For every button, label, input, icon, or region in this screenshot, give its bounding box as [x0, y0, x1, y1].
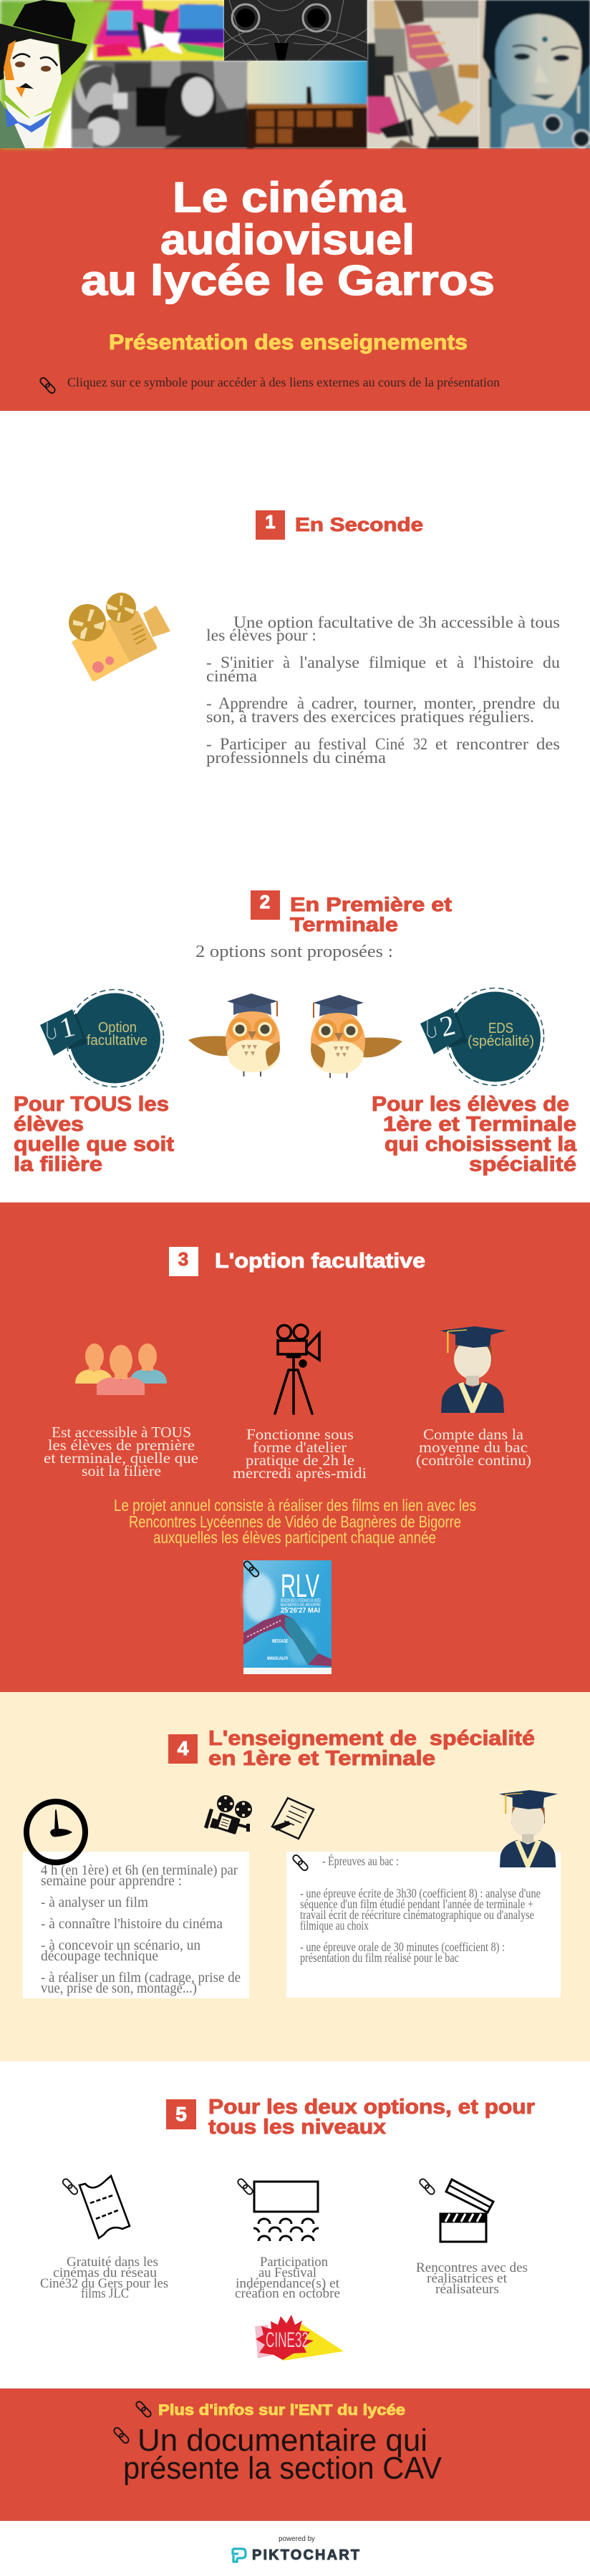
badge 1: 1: [265, 511, 276, 533]
collage: students with camera photo: [367, 0, 479, 148]
text: pour tous: élèves: [14, 1113, 84, 1136]
panel: bac box: séquence d'un film étudié pendant l'année de terminale +: [300, 1897, 533, 1911]
icon: black film projector: [204, 1795, 252, 1834]
logo: Ciné 32: [255, 2315, 344, 2361]
poster: RLV: BAGNÈRES-DE-BIGORRE: [281, 1603, 321, 1608]
panel: hours box: - à analyser un film: [41, 1895, 148, 1910]
collage: black web with eyes: [224, 0, 367, 61]
icon: graduate small: [499, 1790, 558, 1867]
title: Le cinéma: [173, 174, 406, 221]
panel: bac box: [286, 1852, 561, 1998]
text block: section 1 description: et: [435, 653, 448, 671]
text: pour les élèves: [372, 1093, 577, 1176]
text: atelier: forme d'atelier: [253, 1439, 347, 1456]
heading: enseignement de spécialité: L'enseignement de spécialité: [208, 1727, 535, 1750]
panel: section 3: [44, 1247, 531, 1674]
text: pour les élèves: Pour les élèves de: [372, 1093, 569, 1116]
panel: bac box: présentation du film réalisé pour le bac: [300, 1950, 459, 1965]
poster: RLV: [243, 1560, 332, 1674]
panel: hours box: - à connaître l'histoire du cinéma: [41, 1916, 223, 1932]
icon: cinema screen: [237, 2178, 319, 2241]
badge 4: 4: [178, 1737, 189, 1759]
heading: En Première et Terminale: En Première et: [290, 893, 452, 915]
circle: EDS: (spécialité): [468, 1034, 534, 1049]
panel: hours box: vue, prise de son, montage...): [41, 1980, 197, 1996]
title: [81, 174, 495, 304]
badge 3: 3: [178, 1248, 188, 1270]
panel: bac box: - une épreuve orale de 30 minutes (coefficient 8) :: [300, 1940, 505, 1954]
text: festival: création en octobre: [235, 2287, 340, 2301]
text: documentaire: Un documentaire qui: [137, 2423, 427, 2458]
badge 2: 2: [260, 891, 270, 913]
panel: section 4: [23, 1727, 561, 1998]
text block: section 1 description: festival: [318, 735, 367, 753]
text: projet annuel: [114, 1496, 476, 1547]
link legend text: Cliquez sur ce symbole pour accéder à des liens externes au cours de la présentation: [67, 375, 500, 389]
icon: link documentaire: [113, 2426, 130, 2444]
text block: section 1 description: Apprendre: [218, 694, 288, 712]
panel: footer: [113, 2401, 442, 2563]
text: projet annuel: Rencontres Lycéennes de Vidéo de Bagnères de Bigorre: [129, 1512, 461, 1531]
text block: section 1 description: au: [294, 735, 311, 753]
text: projet annuel: Le projet annuel consiste à réaliser des films en lien avec les: [114, 1496, 476, 1515]
text: gratuité: Gratuité dans les: [67, 2255, 158, 2270]
text: gratuité: [40, 2255, 168, 2301]
circle: option facultative: 1: [57, 1010, 78, 1044]
panel: bac box: filmique au choix: [300, 1918, 369, 1933]
text: pour tous: [14, 1093, 174, 1176]
text block: section 1 description: -: [206, 735, 212, 753]
text: atelier: pratique de 2h le: [246, 1452, 354, 1469]
logo: Ciné 32: CINE32: [266, 2328, 309, 2352]
heading: pour les deux options: Pour les deux options, et pour: [208, 2096, 535, 2119]
badge 5: [166, 2099, 196, 2129]
text: pour les élèves: spécialité: [469, 1153, 576, 1176]
icon: link ENT: [135, 2401, 152, 2418]
photo collage banner: [0, 0, 590, 148]
text: powered by: powered by: [279, 2534, 316, 2543]
panel: bac box: travail écrit de réécriture cinématographique ou d'analyse: [300, 1907, 534, 1922]
collage: woman portrait: [479, 0, 590, 148]
panel: hours box: - à concevoir un scénario, un: [41, 1938, 200, 1953]
circle: EDS: EDS: [488, 1021, 513, 1036]
text block: section 1 description: tourner,: [364, 694, 417, 712]
text: accessible: [44, 1424, 198, 1479]
text: pour tous: quelle que soit: [14, 1133, 174, 1156]
icon: camera on tripod: [275, 1325, 319, 1414]
panel: section 1: [69, 510, 561, 767]
icon: clapperboard: [419, 2178, 493, 2242]
text: pour tous: la filière: [14, 1153, 102, 1176]
badge 2: [251, 890, 280, 920]
badge 4: [168, 1734, 198, 1764]
heading: pour les deux options: tous les niveaux: [208, 2116, 386, 2139]
text block: section 1 description: Une option facultative de 3h accessible à tous: [233, 613, 560, 631]
icon: link legend: [39, 376, 56, 394]
text: rencontres: réalisateurs: [435, 2283, 499, 2297]
text: festival: indépendance(s) et: [236, 2277, 340, 2291]
text: atelier: [233, 1426, 367, 1482]
text: documentaire: [123, 2423, 442, 2486]
panel: hours box: - à réaliser un film (cadrage, prise de: [41, 1970, 241, 1986]
text block: section 1 description: rencontrer: [456, 735, 528, 753]
text block: section 1 description: des: [536, 735, 560, 753]
poster: RLV: MESSAGE: [272, 1639, 288, 1644]
text block: section 1 description: à: [283, 653, 290, 671]
text: plus d'infos: Plus d'infos sur l'ENT du lycée: [158, 2402, 405, 2419]
icon: clock: [26, 1802, 85, 1862]
text: moyenne du bac: moyenne du bac: [419, 1439, 528, 1456]
text: gratuité: cinémas du réseau: [53, 2266, 157, 2280]
text block: section 1 description: -: [206, 694, 212, 712]
heading: pour les deux options: [208, 2096, 535, 2139]
badge 3: [169, 1247, 198, 1276]
text: moyenne du bac: Compte dans la: [423, 1426, 524, 1443]
panel: bac box: - une épreuve écrite de 3h30 (coefficient 8) : analyse d'une: [300, 1886, 541, 1900]
text: pour les élèves: qui choisissent la: [385, 1133, 577, 1156]
heading: L'option facultative: L'option facultative: [215, 1250, 425, 1273]
text: gratuité: films JLC: [81, 2287, 129, 2301]
panel: hours box: découpage technique: [41, 1948, 158, 1964]
text block: section 1 description: à: [297, 694, 304, 712]
collage: colourful painting: [93, 0, 224, 61]
text block: section 1 description: du: [543, 653, 561, 671]
text block: section 1 description: et: [435, 735, 448, 753]
icon: people: [75, 1343, 167, 1395]
poster: RLV: RENCONTRES LYCÉENNES DE VIDÉO: [281, 1598, 321, 1603]
text block: section 1 description: l'histoire: [473, 653, 533, 671]
text: accessible: les élèves de première: [48, 1437, 195, 1454]
heading: enseignement de spécialité: en 1ère et Terminale: [208, 1747, 435, 1770]
heading: enseignement de spécialité: [208, 1727, 535, 1770]
text block: section 1 description: filmique: [369, 653, 426, 671]
heading: En Première et Terminale: [290, 893, 452, 935]
text: documentaire: présente la section CAV: [123, 2451, 442, 2486]
panel: section 2: [14, 890, 577, 1176]
text: accessible: soit la filière: [82, 1462, 161, 1479]
circle: option facultative: Option: [98, 1020, 137, 1036]
badge 1: [256, 510, 285, 540]
text block: section 1 description: [206, 613, 561, 767]
text: moyenne du bac: [416, 1426, 531, 1469]
text block: section 1 description: cinéma: [206, 667, 257, 685]
text: festival: [235, 2255, 340, 2301]
text block: section 1 description: les élèves pour :: [206, 626, 316, 644]
text block: section 1 description: professionnels du cinéma: [206, 749, 386, 767]
icon: ticket: [62, 2176, 130, 2238]
collage: black and white classroom: [72, 61, 254, 148]
collage: wall with silhouette: [247, 61, 367, 148]
subtitle: Présentation des enseignements: [109, 331, 468, 354]
text: atelier: Fonctionne sous: [246, 1426, 354, 1443]
text block: section 1 description: S'initier: [221, 653, 274, 671]
collage: Chaplin portrait: [0, 0, 113, 148]
icon: paper and pencil: [272, 1798, 314, 1839]
text: rencontres: [416, 2261, 528, 2297]
circle: option facultative: [40, 989, 163, 1087]
text: moyenne du bac: (contrôle continu): [416, 1452, 531, 1469]
panel: hours box: [23, 1852, 249, 1998]
text: rencontres: Rencontres avec des: [416, 2261, 528, 2275]
text: accessible: et terminale, quelle que: [44, 1449, 198, 1467]
text: 2 options: 2 options sont proposées :: [195, 943, 393, 961]
icon: graduate: [440, 1326, 506, 1413]
text: festival: au Festival: [258, 2266, 316, 2280]
text block: section 1 description: cadrer,: [311, 694, 357, 712]
heading: En Première et Terminale: Terminale: [290, 913, 398, 935]
title: audiovisuel: [160, 216, 415, 263]
icon: owl left: [188, 993, 280, 1076]
circle: option facultative: facultative: [87, 1033, 148, 1049]
text block: section 1 description: monter,: [424, 694, 476, 712]
text: accessible: Est accessible à TOUS: [52, 1424, 191, 1441]
text block: section 1 description: Participer: [220, 735, 286, 753]
text block: section 1 description: son, à travers des exercices pratiques réguliers.: [206, 708, 534, 726]
text block: section 1 description: -: [206, 653, 212, 671]
poster: RLV: RLV: [281, 1568, 319, 1604]
circle: EDS: 2: [437, 1008, 458, 1043]
icon: owl right: [311, 995, 402, 1078]
circle: EDS: [420, 988, 544, 1085]
panel: bac box: - Épreuves au bac :: [322, 1853, 399, 1868]
text block: section 1 description: prendre: [483, 694, 536, 712]
text block: section 1 description: l'analyse: [299, 653, 359, 671]
text: atelier: mercredi après-midi: [233, 1464, 367, 1482]
text: projet annuel: auxquelles les élèves participent chaque année: [153, 1528, 436, 1547]
text: pour les élèves: 1ère et Terminale: [383, 1113, 576, 1136]
panel: hours box: 4 h (en 1ère) et 6h (en terminale) par: [41, 1862, 238, 1878]
text block: section 1 description: Ciné: [375, 735, 405, 753]
badge 5: 5: [175, 2103, 187, 2125]
panel: section 5: [40, 2096, 535, 2361]
title: au lycée le Garros: [81, 257, 495, 304]
text block: section 1 description: du: [543, 694, 561, 712]
text: festival: Participation: [260, 2255, 328, 2270]
logo: Piktochart: PIKTOCHART: [252, 2547, 359, 2563]
text: pour tous: Pour TOUS les: [14, 1093, 169, 1116]
text block: section 1 description: à: [457, 653, 464, 671]
poster: RLV: 25'26'27 MAI: [281, 1607, 320, 1615]
text: gratuité: Ciné32 du Gers pour les: [40, 2277, 168, 2291]
poster: RLV: WWW.RLV65.FR: [267, 1657, 288, 1661]
panel: hours box: semaine pour apprendre :: [41, 1873, 182, 1889]
icon: yellow film camera: [69, 593, 170, 681]
heading: En Seconde: En Seconde: [295, 514, 423, 535]
text: rencontres: réalisatrices et: [427, 2272, 508, 2286]
text block: section 1 description: 32: [413, 735, 427, 753]
